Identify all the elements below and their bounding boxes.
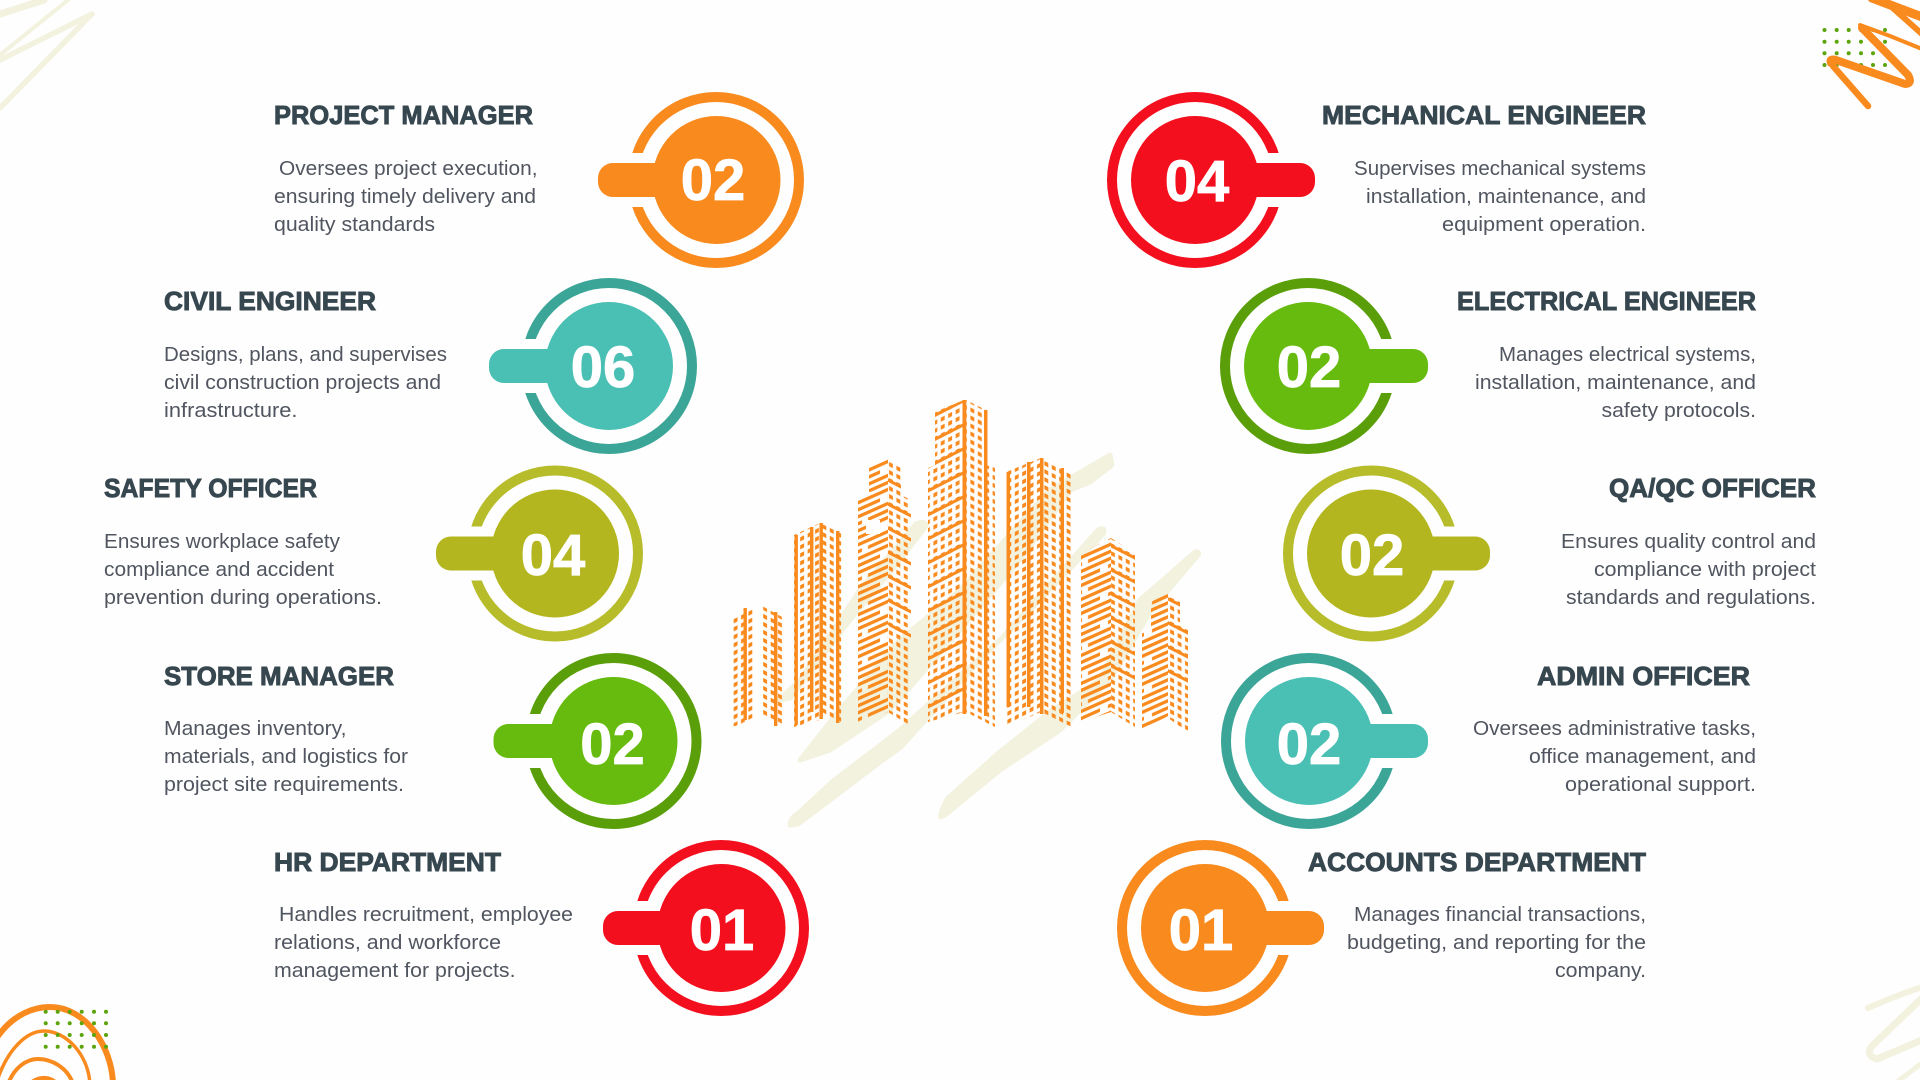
description	[164, 717, 408, 796]
badge 04 red: 04	[1165, 149, 1229, 214]
description: Handles recruitment, employee	[279, 903, 573, 926]
heading: ACCOUNTS DEPARTMENT	[1308, 847, 1646, 877]
description	[164, 343, 447, 422]
decoration: bottom-right cream scribble	[1868, 987, 1920, 1080]
description: safety protocols.	[1602, 399, 1756, 422]
heading: QA/QC OFFICER	[1609, 473, 1816, 503]
building 4	[928, 400, 995, 727]
description	[104, 530, 382, 609]
description: compliance with project	[1594, 558, 1816, 581]
building 5	[1006, 458, 1072, 727]
badge 02 green: 02	[580, 712, 645, 777]
description	[274, 157, 538, 236]
description: operational support.	[1565, 773, 1756, 796]
heading: HR DEPARTMENT	[274, 847, 501, 877]
badge 01 orange: 01	[1169, 898, 1233, 963]
heading: STORE MANAGER	[164, 661, 394, 691]
badge 02 teal: 02	[1277, 712, 1341, 777]
description: relations, and workforce	[274, 931, 501, 954]
item: Admin Officer	[1226, 658, 1756, 824]
badge 02 olive	[1288, 470, 1490, 636]
description: company.	[1555, 959, 1646, 982]
description: standards and regulations.	[1566, 586, 1816, 609]
badge 01 red	[603, 845, 804, 1011]
description: civil construction projects and	[164, 371, 441, 394]
description: Ensures workplace safety	[104, 530, 341, 553]
badge 02 green	[1225, 283, 1428, 449]
heading: CIVIL ENGINEER	[164, 286, 376, 316]
badge 04 olive	[436, 470, 638, 636]
badge 06 teal	[489, 283, 692, 449]
building 3	[858, 458, 911, 726]
description: Manages inventory,	[164, 717, 346, 740]
description	[1347, 903, 1646, 982]
description: management for projects.	[274, 959, 516, 982]
decoration: bottom-left orange fingerprint and dots	[0, 1007, 113, 1080]
badge 01 red: 01	[690, 898, 754, 963]
heading: ADMIN OFFICER	[1537, 661, 1750, 691]
description: Supervises mechanical systems	[1354, 157, 1646, 180]
badge 02 orange	[598, 97, 799, 263]
building 7	[1142, 593, 1188, 732]
building 2	[794, 523, 844, 727]
badge 06 teal: 06	[571, 335, 635, 400]
heading: PROJECT MANAGER	[274, 100, 533, 130]
badge 01 orange	[1122, 845, 1324, 1011]
description: compliance and accident	[104, 558, 334, 581]
description: installation, maintenance, and	[1366, 185, 1646, 208]
description: materials, and logistics for	[164, 745, 408, 768]
description: Designs, plans, and supervises	[164, 343, 447, 366]
item: Project Manager	[274, 97, 799, 263]
description: Oversees administrative tasks,	[1473, 717, 1756, 740]
description: Ensures quality control and	[1561, 530, 1816, 553]
decoration: top-right orange scribble and dots	[1822, 0, 1920, 106]
item: Accounts Department	[1122, 845, 1646, 1011]
description: installation, maintenance, and	[1475, 371, 1756, 394]
badge 04 red	[1112, 97, 1315, 263]
building 6	[1081, 538, 1135, 727]
illustration: cream brush strokes behind skyline	[779, 455, 1199, 825]
badge 02 orange: 02	[681, 148, 745, 213]
description: project site requirements.	[164, 773, 404, 796]
description: budgeting, and reporting for the	[1347, 931, 1646, 954]
description: office management, and	[1529, 745, 1756, 768]
description	[274, 903, 573, 982]
description: infrastructure.	[164, 399, 298, 422]
building 1	[732, 606, 784, 728]
description: Oversees project execution,	[279, 157, 538, 180]
item: Mechanical Engineer	[1112, 97, 1646, 263]
description: ensuring timely delivery and	[274, 185, 536, 208]
description: Manages financial transactions,	[1354, 903, 1646, 926]
item: QA/QC Officer	[1288, 470, 1816, 636]
badge 02 green	[494, 658, 696, 824]
description: prevention during operations.	[104, 586, 382, 609]
item: Electrical Engineer	[1225, 283, 1756, 449]
description: Manages electrical systems,	[1499, 343, 1756, 366]
description	[1475, 343, 1756, 422]
heading: ELECTRICAL ENGINEER	[1457, 286, 1756, 316]
item: Store Manager	[164, 658, 696, 824]
description	[1473, 717, 1756, 796]
badge 04 olive: 04	[521, 523, 585, 588]
item: Civil Engineer	[164, 283, 692, 449]
badge 02 olive: 02	[1340, 523, 1404, 588]
item: Safety Officer	[104, 470, 638, 636]
illustration: skyline of orange buildings	[732, 400, 1188, 732]
decoration: top-left cream scribble	[0, 0, 92, 108]
description	[1561, 530, 1816, 609]
heading: SAFETY OFFICER	[104, 473, 317, 503]
item: HR Department	[274, 845, 804, 1011]
description	[1354, 157, 1646, 236]
badge 02 green: 02	[1277, 335, 1341, 400]
heading: MECHANICAL ENGINEER	[1322, 100, 1646, 130]
description: quality standards	[274, 213, 435, 236]
description: equipment operation.	[1442, 213, 1646, 236]
badge 02 teal	[1226, 658, 1428, 824]
